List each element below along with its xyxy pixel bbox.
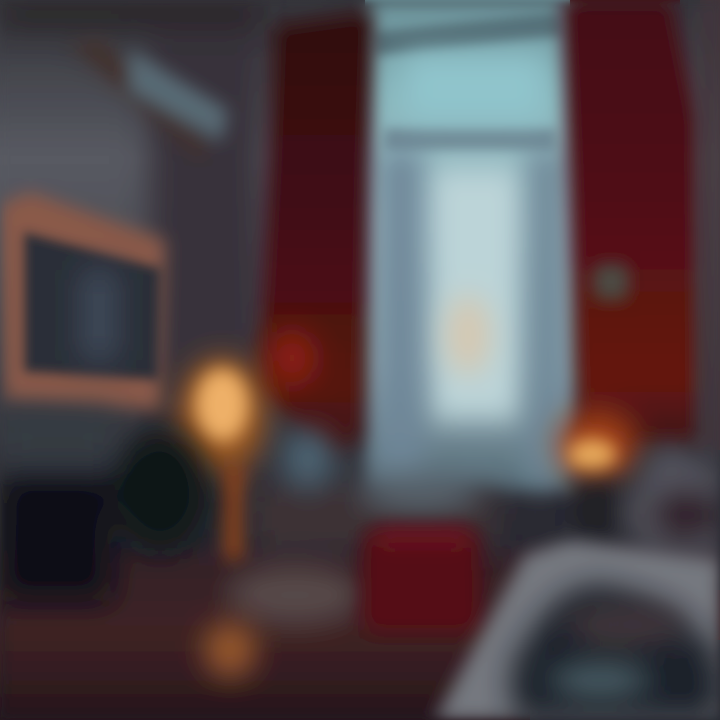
rug [227, 565, 363, 625]
far right wall strip [700, 0, 720, 450]
floor reflection [204, 622, 256, 678]
floor [0, 550, 720, 720]
curtain glow left [268, 330, 316, 386]
left red curtain [258, 12, 372, 455]
lamp glow [178, 357, 266, 560]
dark armchair and left furniture [0, 410, 208, 600]
wall sconce and upper wall panel [70, 38, 228, 160]
central sofa [255, 430, 495, 550]
small object on right curtain [594, 264, 628, 300]
red ottoman [362, 528, 480, 633]
right red curtain [562, 0, 698, 445]
right lamp glow [558, 409, 638, 481]
window [368, 0, 574, 490]
picture frame [0, 192, 165, 410]
right armchair [575, 445, 720, 560]
foreground sofa [435, 540, 720, 720]
